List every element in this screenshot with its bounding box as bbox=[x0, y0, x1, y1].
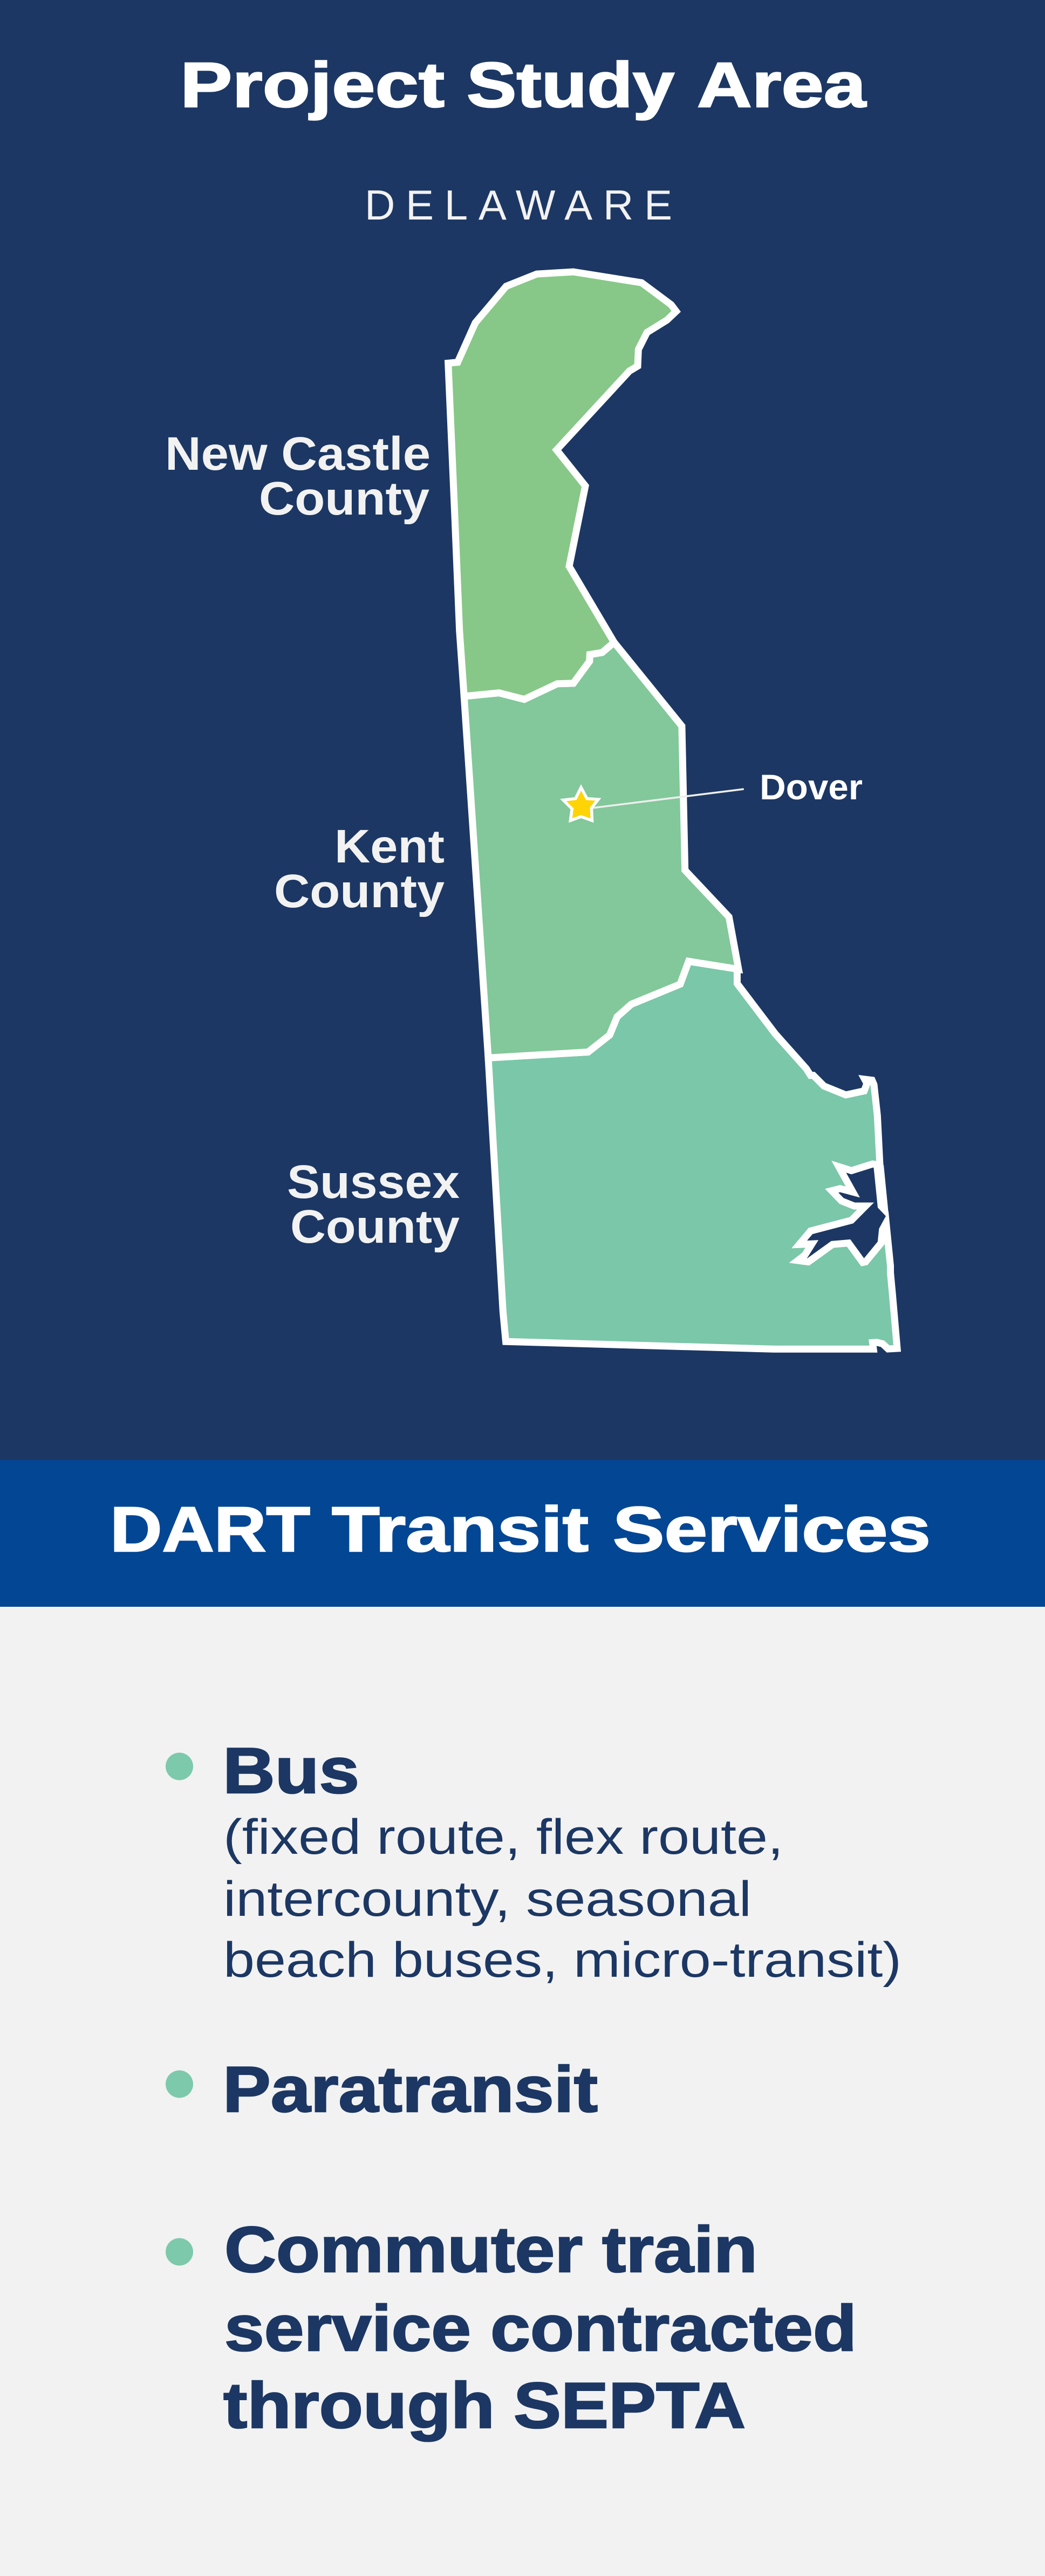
label: sussex county: County bbox=[290, 1201, 460, 1253]
list item: paratransit bbox=[166, 2053, 598, 2126]
label: new castle county: New Castle bbox=[165, 428, 431, 480]
county: sussex bbox=[488, 961, 897, 1349]
heading: dart transit services: Services bbox=[613, 1494, 931, 1565]
item description: (fixed route, flex route, bbox=[223, 1810, 783, 1865]
label: dover: Dover bbox=[760, 767, 863, 807]
label: sussex county: Sussex bbox=[287, 1156, 460, 1208]
item title: commuter train bbox=[223, 2214, 857, 2442]
item title: commuter train: service bbox=[224, 2292, 471, 2365]
label: sussex county bbox=[287, 1156, 460, 1253]
item title: commuter train: contracted bbox=[490, 2292, 857, 2365]
county: new castle bbox=[448, 272, 676, 700]
label: new castle county: County bbox=[259, 472, 429, 525]
item title: commuter train: through bbox=[223, 2369, 495, 2442]
bullet bbox=[166, 2070, 193, 2098]
heading: dart transit services: DART bbox=[110, 1494, 310, 1565]
panel: project study area bbox=[0, 0, 1045, 1460]
county: kent bbox=[464, 642, 739, 1058]
title: project study area: Project bbox=[180, 50, 445, 121]
leader line: dover bbox=[590, 789, 744, 808]
item description: beach buses, micro-transit) bbox=[223, 1933, 901, 1988]
label: kent county: County bbox=[274, 865, 445, 917]
item description: intercounty, seasonal bbox=[223, 1872, 752, 1927]
item title: paratransit: Paratransit bbox=[223, 2053, 598, 2126]
bullet bbox=[166, 1753, 193, 1780]
label: new castle county bbox=[165, 428, 431, 525]
item title: commuter train: Commuter bbox=[224, 2214, 583, 2286]
item description bbox=[223, 1810, 901, 1988]
barrier island bbox=[873, 1161, 889, 1220]
bullet bbox=[166, 2238, 193, 2265]
heading: dart transit services bbox=[110, 1494, 931, 1565]
heading: dart transit services: Transit bbox=[332, 1494, 589, 1565]
panel: services list bbox=[0, 1607, 1045, 2576]
map: delaware counties bbox=[448, 272, 897, 1349]
label: kent county bbox=[274, 820, 445, 917]
title: project study area: Area bbox=[697, 50, 867, 121]
title: project study area bbox=[180, 50, 867, 121]
header band: dart transit services bbox=[0, 1460, 1045, 1607]
title: project study area: Study bbox=[467, 50, 674, 121]
item title: commuter train: SEPTA bbox=[514, 2369, 746, 2442]
list item: bus bbox=[166, 1735, 901, 1988]
item title: commuter train: train bbox=[602, 2214, 757, 2286]
item title: bus: Bus bbox=[223, 1735, 359, 1807]
list item: commuter train bbox=[166, 2214, 857, 2442]
label: kent county: Kent bbox=[334, 820, 445, 873]
icon: star marking dover bbox=[563, 787, 598, 820]
heading: delaware: DELAWARE bbox=[365, 181, 672, 229]
